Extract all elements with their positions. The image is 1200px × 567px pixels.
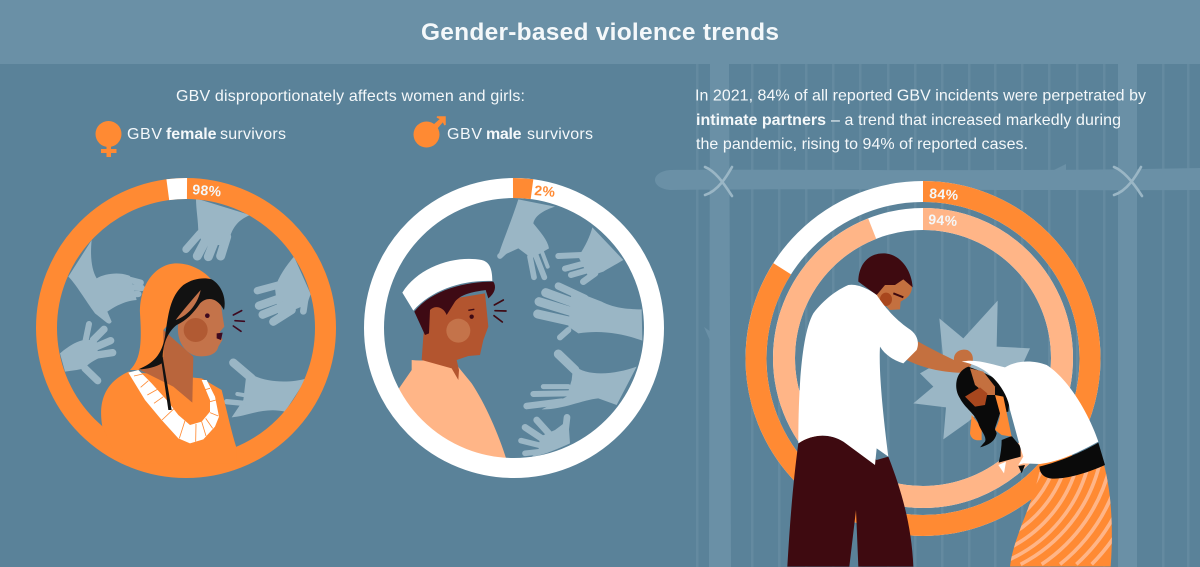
icon: impact starburst xyxy=(913,301,1030,439)
legend: female survivors xyxy=(96,121,286,157)
legend: male survivors: male xyxy=(486,126,522,143)
label: 94%: 94% xyxy=(928,211,958,229)
legend: male survivors: GBV xyxy=(447,126,482,143)
legend: male survivors: survivors xyxy=(527,126,593,143)
legend: female survivors: survivors xyxy=(220,126,286,143)
illustration: man xyxy=(787,253,973,567)
donut chart: 2% male xyxy=(374,188,654,468)
label: 98%: 98% xyxy=(192,181,222,200)
icon: male symbol xyxy=(414,117,445,148)
hands reaching toward man xyxy=(499,199,642,457)
panel: male survivors chart xyxy=(374,182,654,468)
paragraph: intimate partners: the pandemic, rising to 94% of reported cases. xyxy=(696,136,1028,153)
legend: female survivors: female xyxy=(166,126,217,143)
illustration: woman in orange hood xyxy=(101,263,244,463)
panel: intimate partner violence chart xyxy=(756,185,1113,567)
illustration: man in white cap xyxy=(399,259,507,460)
paragraph: intimate partners: – a trend that increased markedly during xyxy=(831,112,1121,129)
icon: female symbol xyxy=(96,121,122,157)
header band xyxy=(0,0,1200,64)
paragraph: intimate partners: In 2021, 84% of all reported GBV incidents were perpetrated by xyxy=(695,88,1146,104)
title: Gender-based violence trends xyxy=(421,19,779,46)
skirt with stripes xyxy=(1007,463,1113,567)
label: 84%: 84% xyxy=(929,185,959,203)
donut chart: 98% female xyxy=(46,188,326,468)
illustration: woman xyxy=(956,361,1113,567)
panel: female survivors chart xyxy=(46,181,326,468)
paragraph: intimate partners xyxy=(695,88,1146,153)
donut chart: 94% during pandemic xyxy=(784,219,1062,497)
fence background xyxy=(655,64,1200,567)
label: 2%: 2% xyxy=(534,182,556,200)
donut chart: 84% all reported incidents xyxy=(756,192,1090,526)
legend: female survivors: GBV xyxy=(127,126,162,143)
legend: male survivors xyxy=(414,117,593,148)
intro text: GBV disproportionately affects women and girls: xyxy=(176,88,525,105)
hands reaching toward woman xyxy=(60,198,311,417)
paragraph: intimate partners: intimate partners xyxy=(696,112,826,129)
